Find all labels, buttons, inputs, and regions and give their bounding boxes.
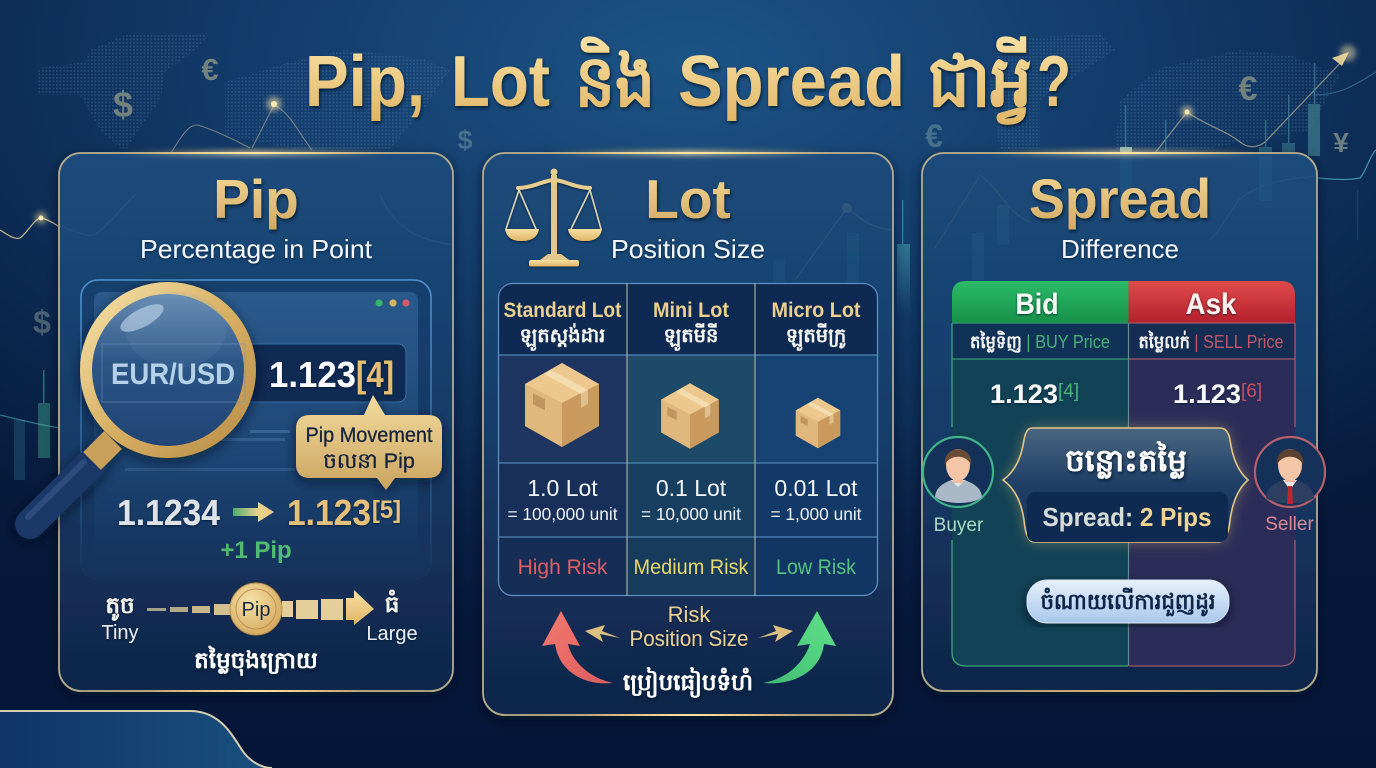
- pip movement row: [117, 492, 401, 564]
- ask price: [6]: [1241, 381, 1262, 402]
- pip size scale: [101, 583, 418, 645]
- column: Standard Lot: 1.0 Lot: [527, 475, 598, 501]
- world map dots right: [990, 33, 1340, 150]
- header: Ask: [1128, 281, 1295, 323]
- bid price: [4]: [1058, 381, 1079, 402]
- icon: Pip coin: Pip: [242, 599, 270, 621]
- icon: buyer: Buyer: [934, 515, 984, 536]
- arrow: red curved up: [542, 611, 613, 683]
- subheading: Difference: Difference: [1061, 234, 1179, 264]
- callout: Pip Movement: Pip Movement: [306, 423, 433, 447]
- chart lines: [171, 105, 312, 153]
- title: Lot: [451, 42, 550, 122]
- icon: balance scale: [505, 168, 602, 266]
- subheading: Position Size: Position Size: [611, 234, 765, 264]
- column: Micro Lot: Low Risk: [776, 556, 856, 579]
- caption: compare size: ប្រៀបធៀបទំហំ: [623, 667, 753, 698]
- column: Standard Lot: = 100,000 unit: [508, 504, 618, 524]
- heading: Lot: Lot: [645, 168, 731, 230]
- column: Standard Lot: High Risk: [518, 556, 608, 579]
- price 1.1234: 1.123: [269, 354, 356, 395]
- background: $: [33, 304, 51, 340]
- background: €: [925, 118, 943, 154]
- bid ask table: [952, 281, 1295, 666]
- column: Mini Lot: [634, 299, 749, 579]
- bottom left corner shape: [0, 711, 272, 768]
- icon: magnifying glass: [28, 288, 250, 524]
- pip size scale: តូច: [105, 592, 135, 621]
- column: Micro Lot: 0.01 Lot: [774, 475, 858, 501]
- arrow: left small: [585, 625, 620, 642]
- label: EUR/USD: EUR/USD: [111, 358, 235, 391]
- background: ¥: [1333, 127, 1349, 158]
- background: $: [113, 84, 133, 125]
- risk vs position size: Position Size: [630, 626, 748, 651]
- heading: Pip: Pip: [213, 168, 299, 230]
- column: Mini Lot: Medium Risk: [634, 556, 749, 579]
- column: Standard Lot: [504, 299, 622, 579]
- risk vs position size: [542, 602, 836, 698]
- candles right: [1120, 63, 1358, 240]
- callout: spread badge: [1003, 428, 1248, 542]
- column: Micro Lot: Micro Lot: [772, 299, 860, 322]
- pip movement row: 1.123: [287, 492, 371, 533]
- arrow: right small: [758, 625, 793, 642]
- icon: buyer: [923, 437, 993, 536]
- background: €: [1239, 70, 1258, 108]
- panel: Pip: [4]: [356, 354, 394, 395]
- icon: seller: [1255, 437, 1325, 535]
- bid price: 1.123: [990, 379, 1058, 409]
- column: Mini Lot: 0.1 Lot: [656, 475, 727, 501]
- panel: Pip: [28, 151, 453, 692]
- icon: seller: Seller: [1265, 514, 1314, 535]
- column: Mini Lot: Mini Lot: [653, 299, 729, 322]
- column: Micro Lot: ឡូតមីក្រូ: [786, 323, 846, 351]
- pip movement row: [5]: [372, 496, 401, 524]
- button: spread cost label: [1027, 580, 1229, 623]
- panel: Spread: [922, 151, 1325, 691]
- pip movement row: 1.1234: [117, 492, 220, 533]
- panel: Lot: [483, 151, 893, 716]
- icon: Pip coin: [230, 583, 282, 635]
- title: ជាអ្វី: [928, 36, 1032, 125]
- header: Ask: Ask: [1186, 288, 1237, 321]
- pip size scale: Tiny: [101, 622, 139, 644]
- glow dots: [35, 212, 47, 224]
- title: [305, 36, 1071, 125]
- column: Standard Lot: Standard Lot: [504, 299, 622, 322]
- column: Mini Lot: ឡូតមីនី: [664, 323, 718, 351]
- column: Standard Lot: ឡូតស្តង់ដារ: [520, 323, 605, 351]
- callout: spread badge: ចន្លោះតម្លៃ: [1065, 440, 1187, 479]
- title: និង: [575, 36, 655, 122]
- header: Bid: Bid: [1016, 288, 1058, 321]
- background: $: [457, 125, 473, 155]
- faint chart inside panel: [773, 203, 893, 283]
- column: Mini Lot: = 10,000 unit: [641, 504, 741, 524]
- column: Micro Lot: = 1,000 unit: [770, 504, 862, 524]
- ask price: 1.123: [1173, 379, 1241, 409]
- pip size scale: Large: [366, 623, 418, 645]
- title: Pip,: [305, 42, 425, 122]
- caption: final price digit: តម្លៃចុងក្រោយ: [194, 645, 318, 676]
- risk vs position size: Risk: [668, 602, 711, 627]
- subheading: Percentage in Point: Percentage in Point: [140, 234, 373, 264]
- button: spread cost label: ចំណាយលើការជួញដូរ: [1040, 587, 1216, 617]
- callout: spread badge: Spread: 2 Pips: [1042, 502, 1212, 532]
- callout: Pip Movement: [296, 395, 442, 490]
- column: Micro Lot: [770, 299, 862, 579]
- label: buy price: តម្លៃទិញ | BUY Price: [970, 330, 1110, 353]
- header: Bid: [952, 281, 1128, 323]
- pip size scale: ធំ: [385, 589, 399, 617]
- faint chart inside panel: [935, 155, 1317, 280]
- world map dots left: [38, 33, 450, 152]
- title: ?: [1037, 42, 1071, 122]
- title: Spread: [678, 42, 905, 122]
- heading: Spread: Spread: [1029, 167, 1211, 230]
- label: sell price: តម្លៃលក់ | SELL Price: [1138, 330, 1284, 353]
- currency symbols: €: [201, 52, 219, 87]
- lot comparison table: [498, 283, 878, 596]
- callout: Pip Movement: ចលនា Pip: [323, 449, 415, 473]
- trading screen: [81, 280, 431, 580]
- candles left: [14, 200, 910, 480]
- label: +1 Pip: +1 Pip: [220, 537, 292, 564]
- arrow: green curved up: [763, 611, 836, 683]
